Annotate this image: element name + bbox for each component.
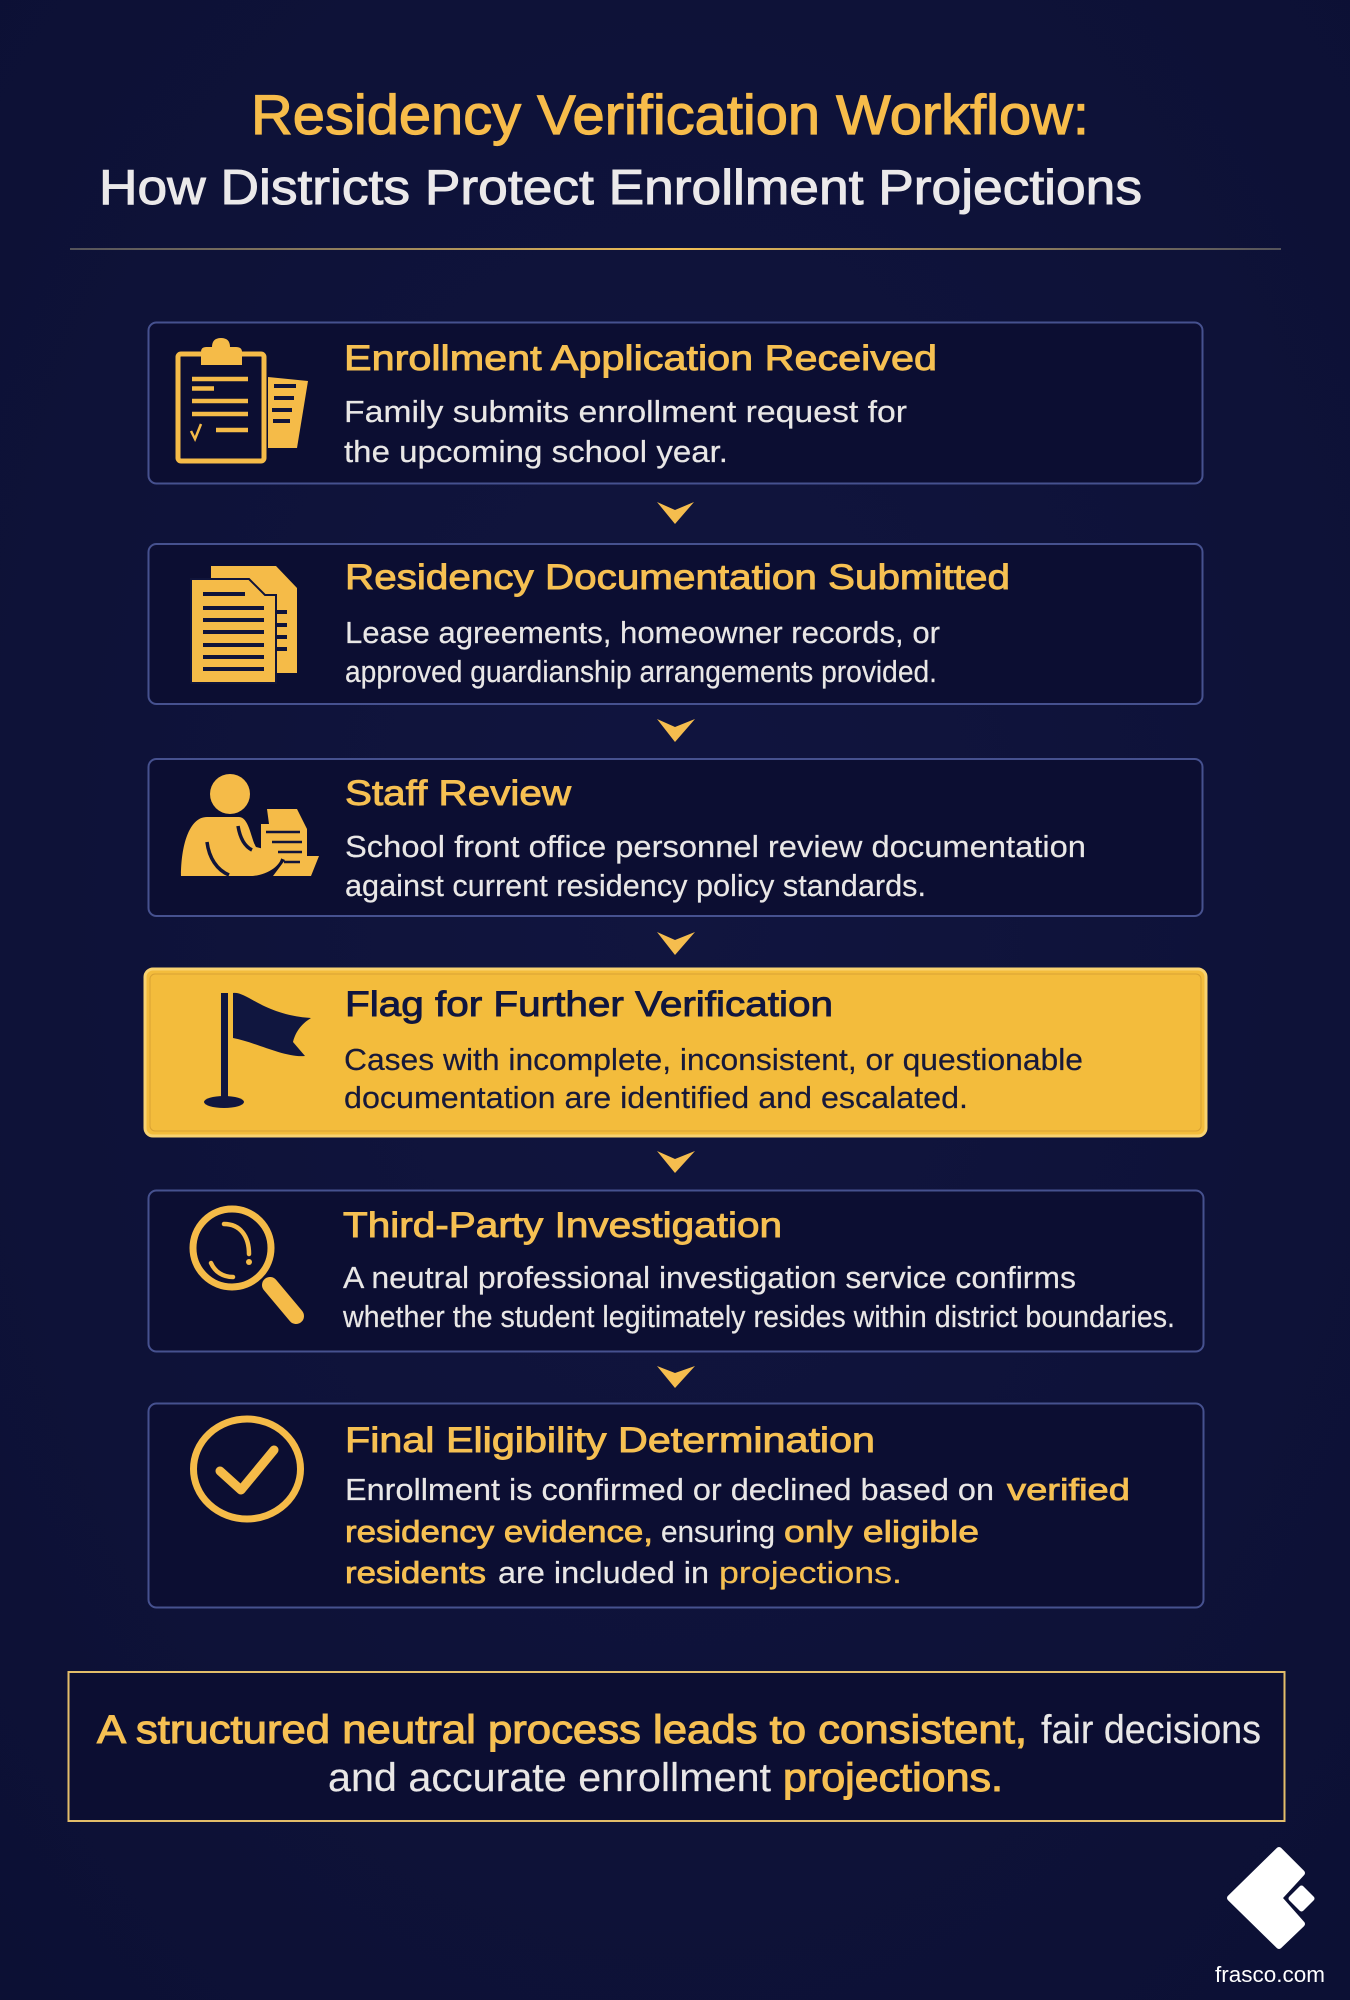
description: residents [345, 1555, 486, 1590]
description: projections. [719, 1555, 902, 1590]
arrow [657, 1366, 695, 1388]
description: the upcoming school year. [344, 434, 728, 469]
description [344, 1042, 1083, 1115]
icon: staff member [181, 774, 319, 876]
description [345, 829, 1086, 903]
title [99, 83, 1142, 215]
icon: documents [191, 566, 297, 683]
logo: frasco: frasco.com [1215, 1962, 1325, 1987]
description: A neutral professional investigation service confirms [343, 1260, 1076, 1295]
description: documentation are identified and escalated. [344, 1080, 968, 1115]
icon: flag [204, 993, 311, 1108]
description: residency evidence, [345, 1514, 653, 1549]
description [345, 1472, 1130, 1590]
description: against current residency policy standards. [345, 868, 926, 903]
description: ensuring [661, 1514, 775, 1549]
panel: enrollment application received [148, 322, 1202, 484]
callout [68, 1672, 1284, 1821]
description: Cases with incomplete, inconsistent, or questionable [344, 1042, 1083, 1077]
heading: Flag for Further Verification [345, 985, 833, 1024]
description: only eligible [784, 1514, 979, 1549]
description: are included in [498, 1555, 709, 1590]
panel: final eligibility determination [148, 1404, 1204, 1608]
logo: frasco [1215, 1850, 1325, 1987]
description: Enrollment is confirmed or declined based on [345, 1472, 994, 1507]
panel: flag for further verification [145, 969, 1206, 1136]
description: School front office personnel review documentation [345, 829, 1086, 864]
description: verified [1007, 1472, 1130, 1507]
description: approved guardianship arrangements provided. [345, 654, 937, 689]
description [342, 1260, 1175, 1334]
description [344, 394, 907, 469]
panel: staff review [148, 759, 1202, 916]
description: Lease agreements, homeowner records, or [345, 615, 940, 650]
title: Residency Verification Workflow: [251, 83, 1089, 146]
icon: clipboard [178, 338, 308, 461]
panel: third-party investigation [148, 1190, 1204, 1352]
heading: Enrollment Application Received [344, 339, 937, 378]
title: How Districts Protect Enrollment Projections [99, 161, 1142, 215]
arrow [657, 719, 695, 742]
heading: Residency Documentation Submitted [345, 558, 1010, 597]
description: whether the student legitimately resides within district boundaries. [342, 1299, 1175, 1334]
callout: fair decisions [1041, 1708, 1261, 1752]
heading: Staff Review [345, 774, 572, 813]
icon: magnifying glass [193, 1209, 296, 1316]
arrow [657, 1151, 695, 1173]
panel: residency documentation submitted [148, 544, 1202, 704]
heading: Third-Party Investigation [343, 1206, 782, 1245]
icon: check circle [194, 1419, 300, 1519]
description: Family submits enrollment request for [344, 394, 907, 429]
callout: A structured neutral process leads to consistent, [97, 1708, 1027, 1752]
heading: Final Eligibility Determination [345, 1421, 875, 1460]
arrow [657, 502, 694, 524]
arrow [657, 932, 695, 955]
callout: and accurate enrollment [328, 1756, 771, 1800]
callout: projections. [783, 1756, 1003, 1800]
description [345, 615, 940, 689]
